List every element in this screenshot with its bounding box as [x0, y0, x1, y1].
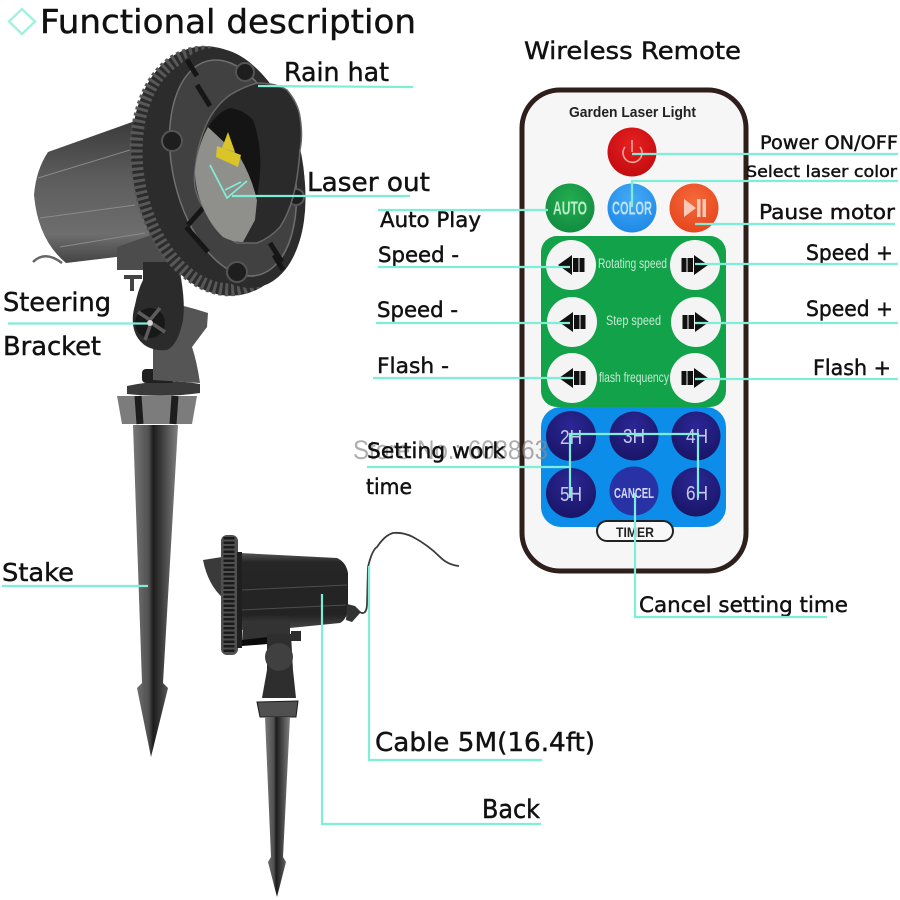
callout: Speed plus step: Speed +: [806, 297, 893, 321]
green speed panel: Step speed: [606, 312, 661, 328]
housing body: [34, 120, 175, 263]
icon: mint diamond: [9, 9, 35, 34]
timer button labels: 5H: [560, 484, 582, 506]
timer button labels: [560, 426, 708, 506]
ring face: [136, 33, 328, 303]
right buttons: [670, 240, 721, 403]
cable stub: [33, 256, 62, 263]
callout: Cancel setting time: [635, 493, 848, 617]
callout: Steering Bracket: [3, 288, 148, 362]
watermark: Store No.: 608863: [353, 435, 548, 465]
cable: [357, 533, 459, 613]
callout: Speed minus rotating: Speed -: [378, 243, 459, 267]
callout: Speed minus step: Speed -: [377, 298, 458, 322]
callout: Flash plus: Flash +: [813, 356, 891, 380]
remote heading: Wireless Remote: [524, 37, 741, 65]
bracket plate: [242, 620, 290, 643]
product photo: back view of laser light on stake: [203, 533, 459, 897]
rain hat side: [203, 557, 223, 598]
rear body ribs: [242, 585, 347, 610]
callout: Cable length: [369, 566, 595, 760]
color button: COLOR: [612, 198, 652, 218]
color button: [608, 184, 656, 232]
pivot knob: [135, 308, 165, 340]
collar ribs: [138, 396, 175, 424]
ring spokes: [186, 60, 283, 270]
callout: Setting work time: [366, 434, 698, 499]
lens top shadow: [208, 108, 260, 200]
left buttons: [546, 240, 597, 403]
collar top disk: [127, 381, 200, 396]
auto button: [546, 184, 594, 232]
green speed panel: [541, 236, 726, 407]
rear spike: [265, 717, 290, 897]
rear body: [240, 553, 348, 630]
callout: Back: Back: [482, 795, 540, 825]
laser warning label: [216, 132, 241, 167]
timer button labels: 6H: [686, 483, 708, 505]
rear bracket: [262, 634, 296, 698]
callout: Steering Bracket: Bracket: [3, 332, 101, 362]
timer button labels: CANCEL: [614, 485, 654, 502]
outer ring with teeth: [111, 31, 325, 311]
callout: Setting work time: Setting work: [367, 439, 506, 463]
callout: Rain hat: Rain hat: [284, 58, 389, 88]
timer button labels: 4H: [686, 426, 708, 448]
collar: [117, 396, 197, 424]
timer button labels: 3H: [623, 426, 645, 448]
callout: Setting work time: time: [366, 475, 412, 499]
timer pill: TIMER: [616, 524, 654, 540]
blue timer panel: [541, 407, 726, 527]
callout: Steering Bracket: Steering: [3, 288, 111, 318]
lens glass: [195, 127, 257, 242]
callout: Select laser color: [632, 162, 898, 207]
mounting block under the housing: [117, 232, 185, 270]
callout: Cable length: Cable 5M(16.4ft): [375, 728, 595, 758]
callout: Pause motor: Pause motor: [759, 200, 896, 224]
remote body: [522, 90, 746, 571]
power button: [608, 128, 656, 176]
laser symbol: [210, 165, 247, 198]
green speed panel: flash frequency: [599, 369, 669, 385]
speed labels: Rotating speed: [598, 255, 667, 271]
callout: Flash minus: Flash -: [377, 354, 449, 378]
ribs: [38, 150, 145, 247]
callout: Speed plus rotating: Speed +: [806, 241, 893, 265]
screw on bracket: [124, 277, 142, 291]
callout: Back: [322, 594, 541, 825]
rear collar: [257, 701, 298, 717]
pause button: [670, 184, 718, 232]
callout: Auto Play: Auto Play: [380, 208, 481, 232]
auto button: AUTO: [553, 198, 587, 218]
callout: Stake: Stake: [2, 558, 74, 587]
timer pill: [597, 521, 673, 541]
heading text: Functional description: [40, 2, 416, 41]
rain hat: [194, 83, 302, 243]
bracket dark pivot: [133, 262, 184, 350]
remote brand name: Garden Laser Light: [569, 104, 696, 121]
lock nut: [142, 369, 174, 383]
rear toothed ring: [221, 535, 238, 655]
callout: Cancel setting time: Cancel setting time: [639, 593, 848, 617]
title: Functional description: [9, 2, 416, 41]
callout: Laser out: Laser out: [307, 168, 430, 198]
remote control: [522, 90, 746, 571]
spike: [133, 425, 178, 757]
product photo: front view of laser light on stake: [33, 31, 328, 757]
callout: Power ON/OFF: Power ON/OFF: [760, 132, 898, 154]
timer buttons: [546, 411, 720, 518]
screws: [162, 63, 304, 282]
cable gland: [346, 604, 361, 622]
callout: Select laser color: Select laser color: [746, 162, 897, 181]
timer button labels: 2H: [560, 427, 582, 449]
bracket arm: [153, 305, 208, 383]
